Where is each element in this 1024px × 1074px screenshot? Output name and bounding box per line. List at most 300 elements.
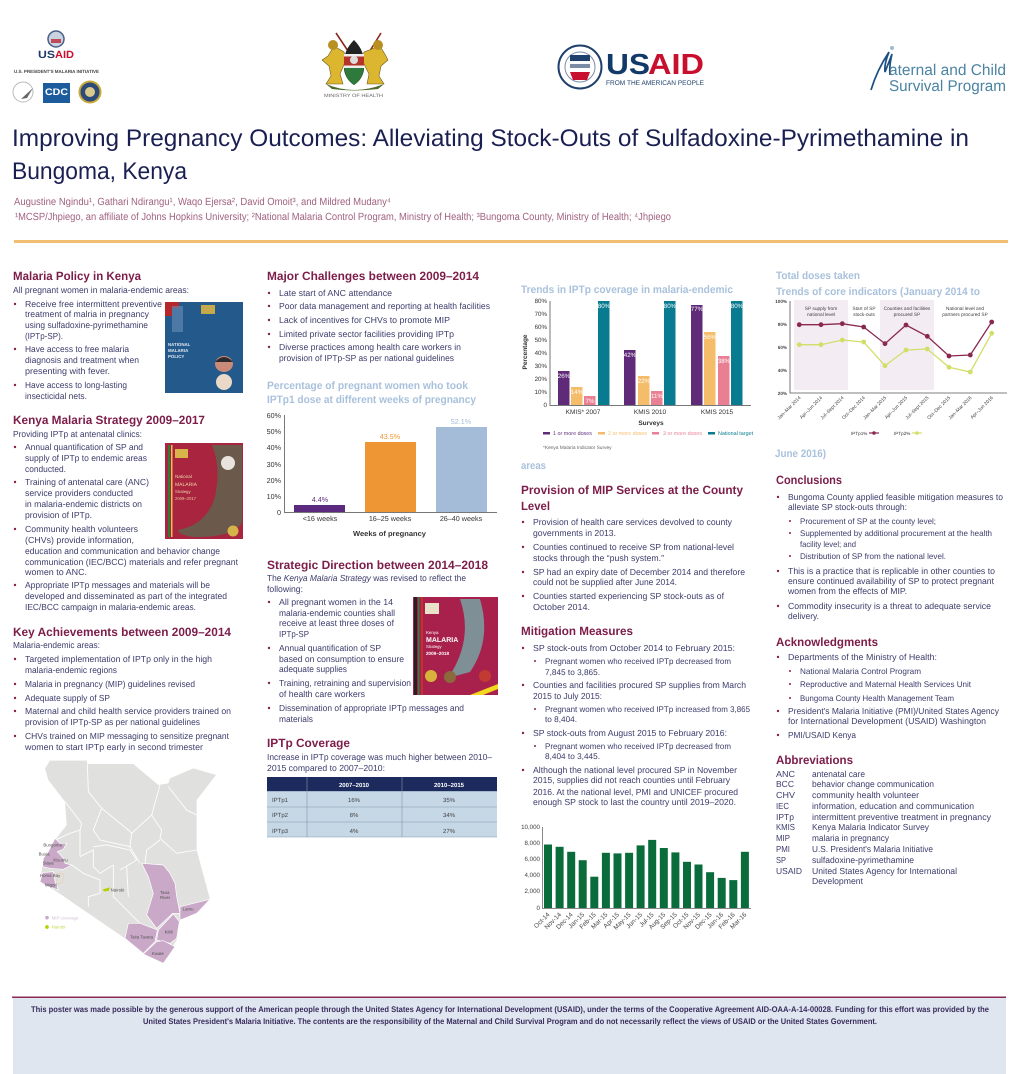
mitigation bullet list: 7,845 to 3,865. xyxy=(545,668,600,677)
IPTp coverage table: 35% xyxy=(443,797,456,804)
IPTp coverage table: 16% xyxy=(348,797,361,804)
chart: trends of core indicators line chart: 40% xyxy=(778,368,787,373)
map legend xyxy=(45,915,78,930)
provision bullet list xyxy=(522,517,745,612)
chart: trends in IPTp coverage in malaria-endemic areas: 70% xyxy=(535,311,547,318)
chart: trends in IPTp coverage in malaria-endemic areas: 38% xyxy=(718,358,731,365)
chart legend xyxy=(543,431,754,437)
chart: trends in IPTp coverage in malaria-endemic areas: areas xyxy=(521,460,546,472)
abbreviation list: Kenya Malaria Indicator Survey xyxy=(812,822,930,832)
panel: Mitigation Measures xyxy=(521,624,750,807)
map legend: MIP coverage xyxy=(52,915,78,920)
title xyxy=(12,125,969,185)
chart: monthly pregnant women receiving IPTp: Jan-15 xyxy=(567,911,586,930)
county labels: Migori xyxy=(45,883,57,888)
abbreviation list: sulfadoxine-pyrimethamine xyxy=(812,855,914,865)
chart: trends in IPTp coverage in malaria-endemic areas: 30% xyxy=(535,363,547,370)
chart: IPTp1 dose by weeks of pregnancy: 43.5% xyxy=(380,432,401,441)
logo: Maternal and Child Survival Program: Survival Program xyxy=(889,78,1006,95)
logo: USAID from the American people xyxy=(558,46,704,88)
panel: Acknowledgments: Acknowledgments xyxy=(776,635,878,649)
policy bullet list: Receive free intermittent preventive xyxy=(25,299,162,309)
chart: trends of core indicators line chart: Jan–Mar 2015 xyxy=(862,395,888,421)
panel: IPTp Coverage: 2015 compared to 2007–2010: xyxy=(267,763,385,773)
image: Kenya Malaria Strategy 2009-2018 cover: Strategy xyxy=(426,644,443,649)
policy bullet list xyxy=(14,299,162,401)
panel: Key Achievements between 2009–2014 xyxy=(13,625,231,752)
strategy bullet list: Appropriate IPTp messages and materials will be xyxy=(25,580,210,590)
orange county outline xyxy=(57,873,63,884)
abbreviation list: ANC xyxy=(776,769,796,779)
chart: trends in IPTp coverage in malaria-endemic areas: Surveys xyxy=(638,420,664,427)
strategic direction bullet list: IPTp-SP xyxy=(279,629,309,639)
chart: trends of core indicators line chart: 80% xyxy=(778,322,787,327)
footer: funding disclaimer xyxy=(12,996,1006,1074)
chart: IPTp1 dose by weeks of pregnancy: 60% xyxy=(267,411,282,420)
provision bullet list: could not be supplied after June 2014. xyxy=(533,577,677,587)
IPTp2 line xyxy=(797,331,994,374)
logo: USAID from the American people: FROM THE AMERICAN PEOPLE xyxy=(606,80,704,87)
chart: trends in IPTp coverage in malaria-endemic areas: 11% xyxy=(651,393,663,400)
policy bullet list: (IPTp-SP). xyxy=(25,331,63,341)
challenges bullet list: Poor data management and reporting at health facilities xyxy=(279,301,491,311)
panel: Kenya Malaria Strategy 2009–2017 xyxy=(13,413,243,612)
chart: monthly pregnant women receiving IPTp: Nov-14 xyxy=(543,911,563,931)
chart: monthly pregnant women receiving IPTp: Mar-15 xyxy=(590,911,610,931)
policy bullet list: using sulfadoxine-pyrimethamine xyxy=(25,320,148,330)
chart: trends of core indicators line chart: National level and xyxy=(946,306,984,312)
panel: Acknowledgments xyxy=(776,635,1000,740)
chart: trends in IPTp coverage in malaria-endemic areas: Percentage xyxy=(522,334,529,370)
provision bullet list: stocks through the “push system.” xyxy=(533,553,664,563)
line chart legend: IPTp2% xyxy=(894,431,910,436)
image: Kenya Malaria Strategy 2009-2018 cover: 2009–2018 xyxy=(426,651,449,656)
chart: monthly pregnant women receiving IPTp: Sep-15 xyxy=(659,911,679,931)
chart: IPTp1 dose by weeks of pregnancy: 26–40 weeks xyxy=(440,514,483,523)
chart: trends of core indicators line chart: 60% xyxy=(778,345,787,350)
chart: trends of core indicators line chart: Oct–Dec 2014 xyxy=(841,395,867,421)
chart: trends of core indicators line chart: 20% xyxy=(778,391,787,396)
mitigation bullet list: SP stock-outs from August 2015 to February 2016: xyxy=(533,728,727,738)
achievements bullet list: Adequate supply of SP xyxy=(25,693,110,703)
conclusions bullet list: Supplemented by additional procurement at the health xyxy=(800,529,992,538)
chart: IPTp1 dose by weeks of pregnancy: 40% xyxy=(267,443,282,452)
chart: trends of core indicators line chart: Start of SP xyxy=(852,306,876,312)
strategic direction bullet list: receive at least three doses of xyxy=(279,618,395,628)
chart: trends of core indicators line chart: Jan–Mar 2016 xyxy=(947,395,974,421)
strategic direction bullet list xyxy=(268,597,464,724)
chart: trends in IPTp coverage in malaria-endemic areas: Trends in IPTp coverage in malaria-endemic xyxy=(521,284,733,296)
logo: Maternal and Child Survival Program: aternal and Child xyxy=(889,62,1006,79)
strategy bullet list xyxy=(14,442,239,612)
chart: IPTp1 dose by weeks of pregnancy: 4.4% xyxy=(312,495,329,504)
chart: monthly pregnant women receiving IPTp xyxy=(521,824,751,931)
chart: IPTp1 dose by weeks of pregnancy: 30% xyxy=(267,460,282,469)
county labels: River xyxy=(160,895,170,900)
chart legend: 3 or more doses xyxy=(663,431,702,437)
panel: IPTp Coverage: Increase in IPTp coverage was much higher between 2010– xyxy=(267,752,492,762)
challenges bullet list: Lack of incentives for CHVs to promote MIP xyxy=(279,315,450,325)
panel: Provision of MIP Services at the County Level: Level xyxy=(521,499,550,513)
chart: monthly pregnant women receiving IPTp: Aug-15 xyxy=(648,911,668,931)
chart: trends in IPTp coverage in malaria-endemic areas: 80% xyxy=(598,303,611,310)
chart: monthly pregnant women receiving IPTp: Feb-15 xyxy=(578,911,598,931)
chart: trends of core indicators line chart: SP supply from xyxy=(805,306,837,312)
chart: monthly pregnant women receiving IPTp: 2,000 xyxy=(525,888,541,895)
policy bullet list: Have access to long-lasting xyxy=(25,380,127,390)
county labels: Tana xyxy=(160,890,170,895)
chart: trends in IPTp coverage in malaria-endemic areas: 7% xyxy=(586,398,595,405)
chart: monthly pregnant women receiving IPTp: Dec-14 xyxy=(555,911,575,931)
chart: trends of core indicators line chart: Trends of core indicators (January 2014 to xyxy=(776,286,980,298)
panel: Kenya Malaria Strategy 2009–2017: Providing IPTp at antenatal clinics: xyxy=(13,429,142,439)
panel: Malaria Policy in Kenya xyxy=(13,269,243,401)
chart: trends of core indicators line chart: June 2016) xyxy=(775,448,826,460)
acknowledgments bullet list: Departments of the Ministry of Health: xyxy=(788,652,937,662)
conclusions bullet list: Commodity insecurity is a threat to adequate service xyxy=(788,601,991,611)
abbreviation list: intermittent preventive treatment in pregnancy xyxy=(812,812,992,822)
mitigation bullet list: Pregnant women who received IPTp decreased from xyxy=(545,657,731,666)
county labels xyxy=(39,842,194,956)
abbreviation list: malaria in pregnancy xyxy=(812,833,890,843)
chart: trends of core indicators line chart: Counties and facilities xyxy=(884,306,931,312)
chart: trends in IPTp coverage in malaria-endemic areas: 0 xyxy=(544,402,548,409)
challenges bullet list: Diverse practices among health care workers in xyxy=(279,342,461,352)
county labels: Nairobi xyxy=(111,887,124,892)
chart: trends in IPTp coverage in malaria-endemic areas: 80% xyxy=(664,303,677,310)
policy bullet list: treatment of malria in pregnancy xyxy=(25,309,150,319)
provision bullet list: Counties started experiencing SP stock-outs as of xyxy=(533,591,725,601)
image: Kenya Malaria Strategy 2009-2018 cover: Kenya xyxy=(426,630,439,635)
IPTp coverage table: 27% xyxy=(443,828,456,835)
chart legend: 2 or more doses xyxy=(608,431,647,437)
mitigation bullet list: enough SP stock to last the country until 2019–2020. xyxy=(533,797,736,807)
achievements bullet list xyxy=(14,654,231,752)
line chart legend xyxy=(851,431,922,436)
chart: trends of core indicators line chart xyxy=(775,270,1007,460)
panel: Key Achievements between 2009–2014: Key Achievements between 2009–2014 xyxy=(13,625,231,639)
acknowledgments bullet list: for International Development (USAID) Washington xyxy=(788,716,986,726)
strategic direction bullet list: adequate supplies xyxy=(279,664,348,674)
achievements bullet list: Targeted implementation of IPTp only in the high xyxy=(25,654,212,664)
mitigation bullet list: 2015, supplies did not reach counties until February xyxy=(533,775,731,785)
panel: Provision of MIP Services at the County Level xyxy=(521,483,745,612)
achievements bullet list: provision of IPTp-SP as per national guidelines xyxy=(25,717,201,727)
logo: Kenya Ministry of Health coat of arms xyxy=(322,33,388,99)
chart: monthly pregnant women receiving IPTp: 6,000 xyxy=(525,856,541,863)
chart: trends of core indicators line chart: stock-outs xyxy=(853,312,876,318)
chart: trends in IPTp coverage in malaria-endemic areas: KMIS 2010 xyxy=(634,409,666,416)
provision bullet list: SP had an expiry date of December 2014 and therefore xyxy=(533,567,745,577)
panel: Malaria Policy in Kenya: All pregnant women in malaria-endemic areas: xyxy=(13,285,189,295)
strategy bullet list: Community health volunteers xyxy=(25,524,139,534)
policy bullet list: insecticidal nets. xyxy=(25,391,87,401)
county labels: Kisumu xyxy=(53,858,68,863)
strategic direction bullet list: Training, retraining and supervision xyxy=(279,678,411,688)
chart: monthly pregnant women receiving IPTp: Dec-15 xyxy=(694,911,714,931)
IPTp coverage table: 4% xyxy=(350,828,359,835)
county labels: Kwale xyxy=(152,951,164,956)
gold divider xyxy=(14,240,1008,243)
logo: Kenya Ministry of Health coat of arms: MINISTRY OF HEALTH xyxy=(324,93,384,99)
strategy bullet list: IEC/BCC campaign in malaria-endemic areas. xyxy=(25,602,196,612)
chart: trends in IPTp coverage in malaria-endemic areas: *Kenya Malaria Indicator Survey xyxy=(543,445,612,451)
chart: trends in IPTp coverage in malaria-endemic areas xyxy=(521,284,754,472)
chart: monthly pregnant women receiving IPTp: Feb-16 xyxy=(717,911,737,931)
authors and affiliations: ¹MCSP/Jhpiego, an affiliate of Johns Hopkins University; ²National Malaria Control Program, Ministry of Health; ³Bungoma County, Ministry of Health; ⁴Jhpiego xyxy=(15,212,671,223)
chart: monthly pregnant women receiving IPTp: Nov-15 xyxy=(682,911,702,931)
chart: monthly pregnant women receiving IPTp: Jul-15 xyxy=(638,911,656,929)
image: National Malaria Policy cover: NATIONAL xyxy=(168,342,191,347)
panel: Major Challenges between 2009–2014: Major Challenges between 2009–2014 xyxy=(267,269,479,283)
chart: trends of core indicators line chart: Jan–Mar 2014 xyxy=(776,395,803,421)
strategy bullet list: women to ANC. xyxy=(24,567,87,577)
image: Kenya Malaria Strategy 2009-2017 cover xyxy=(165,443,243,539)
panel: Strategic Direction between 2014–2018: following: xyxy=(267,584,303,594)
strategic direction bullet list: based on consumption to ensure xyxy=(279,654,404,664)
image: National Malaria Policy cover: POLICY xyxy=(168,354,184,359)
abbreviation list: SP xyxy=(776,855,786,865)
abbreviation list: United States Agency for International xyxy=(812,866,957,876)
logo: USAID President's Malaria Initiative block: U.S. PRESIDENT'S MALARIA INITIATIVE xyxy=(14,69,99,74)
chart: trends of core indicators line chart: 100% xyxy=(775,299,787,304)
policy bullet list: presenting with fever. xyxy=(25,366,110,376)
mitigation bullet list xyxy=(522,643,750,807)
chart legend: National target xyxy=(718,431,754,437)
panel: Conclusions xyxy=(776,473,1003,621)
strategy bullet list: education and communication and behavior change xyxy=(25,546,220,556)
conclusions bullet list: Bungoma County applied feasible mitigation measures to xyxy=(788,492,1003,502)
strategy bullet list: developed and disseminated as part of the integrated xyxy=(25,591,227,601)
conclusions bullet list: This is a practice that is replicable in other counties to xyxy=(788,566,995,576)
chart: monthly pregnant women receiving IPTp: Jun-15 xyxy=(625,911,644,930)
abbreviation list xyxy=(776,769,992,886)
abbreviation list: Development xyxy=(812,876,864,886)
county labels: Taita Taveta xyxy=(130,935,153,940)
achievements bullet list: malaria-endemic regions xyxy=(25,665,118,675)
conclusions bullet list: facility level; and xyxy=(800,540,856,549)
abbreviation list: U.S. President's Malaria Initiative xyxy=(812,844,933,854)
achievements bullet list: Malaria in pregnancy (MIP) guidelines revised xyxy=(25,679,195,689)
mitigation bullet list: 8,404 to 3,445. xyxy=(545,752,600,761)
IPTp coverage table: 34% xyxy=(443,812,456,819)
logo: USAID from the American people: AID xyxy=(648,49,704,81)
title: Bungoma, Kenya xyxy=(12,158,188,185)
chart: trends of core indicators line chart: Apr–Jun 2015 xyxy=(884,395,909,421)
chart: trends of core indicators line chart: Apr–Jun 2014 xyxy=(799,395,824,421)
abbreviation list: community health volunteer xyxy=(812,790,919,800)
strategy bullet list: supply of IPTp to endemic areas xyxy=(25,453,148,463)
conclusions bullet list: ensure continued availability of SP to protect pregnant xyxy=(788,576,995,586)
logo: USAID President's Malaria Initiative block xyxy=(13,31,100,103)
chart: monthly pregnant women receiving IPTp: Mar-16 xyxy=(729,911,749,931)
image: Kenya Malaria Strategy 2009-2018 cover xyxy=(413,597,498,695)
county labels: Homa Bay xyxy=(40,873,60,878)
footer: funding disclaimer: United States President's Malaria Initiative. The contents are the responsibility of the Maternal and Child Survival Program and do not necessarily reflect the views of USAID or the United States Government. xyxy=(143,1017,877,1026)
chart: monthly pregnant women receiving IPTp: 10,000 xyxy=(521,824,541,831)
image: National Malaria Policy cover: MALARIA xyxy=(168,348,189,353)
abbreviation list: USAID xyxy=(776,866,802,876)
chart: trends in IPTp coverage in malaria-endemic areas: 80% xyxy=(535,298,547,305)
image: Kenya Malaria Strategy 2009-2017 cover: National xyxy=(175,474,192,479)
abbreviation list: KMIS xyxy=(776,822,795,832)
map of Kenya with MIP counties xyxy=(39,761,216,963)
IPTp coverage table: 2010–2015 xyxy=(434,782,465,789)
chart: monthly pregnant women receiving IPTp: 0 xyxy=(537,905,541,912)
conclusions bullet list: Distribution of SP from the national level. xyxy=(800,552,946,561)
panel: Malaria Policy in Kenya: Malaria Policy in Kenya xyxy=(13,269,141,283)
mitigation bullet list: Although the national level procured SP in November xyxy=(533,765,737,775)
MIP counties in purple xyxy=(40,838,210,963)
chart: trends of core indicators line chart: partners procured SP xyxy=(942,312,988,318)
achievements bullet list: CHVs trained on MIP messaging to sensitize pregnant xyxy=(25,731,230,741)
panel: Conclusions: Conclusions xyxy=(776,473,842,487)
chart: trends in IPTp coverage in malaria-endemic areas: KMIS* 2007 xyxy=(566,409,601,416)
authors and affiliations xyxy=(14,197,671,223)
chart: trends in IPTp coverage in malaria-endemic areas: 26% xyxy=(558,373,571,380)
chart: trends in IPTp coverage in malaria-endemic areas: 22% xyxy=(638,378,651,385)
mitigation bullet list: SP stock-outs from October 2014 to February 2015: xyxy=(533,643,735,653)
chart: IPTp1 dose by weeks of pregnancy: <16 weeks xyxy=(303,514,338,523)
challenges bullet list: provision of IPTp-SP as per national guidelines xyxy=(279,353,455,363)
strategy bullet list: communication (IEC/BCC) materials and refer pregnant xyxy=(25,557,239,567)
conclusions bullet list: alleviate SP stock-outs through: xyxy=(788,502,907,512)
strategic direction bullet list: malaria-endemic counties shall xyxy=(279,608,395,618)
chart: trends of core indicators line chart: procured SP xyxy=(894,312,920,318)
panel: Mitigation Measures: Mitigation Measures xyxy=(521,624,633,638)
image: National Malaria Policy cover xyxy=(165,302,243,393)
chart: trends in IPTp coverage in malaria-endemic areas: 42% xyxy=(624,352,637,359)
panel: Key Achievements between 2009–2014: Malaria-endemic areas: xyxy=(13,640,100,650)
mitigation bullet list: 2015 to July 2015: xyxy=(533,691,602,701)
chart: IPTp1 dose by weeks of pregnancy: Weeks of pregnancy xyxy=(353,529,426,538)
IPTp coverage table: IPTp1 xyxy=(272,797,289,804)
provision bullet list: governments in 2013. xyxy=(533,528,616,538)
chart: monthly pregnant women receiving IPTp: 8,000 xyxy=(525,840,541,847)
conclusions bullet list: women from the effects of MIP. xyxy=(787,586,907,596)
abbreviation list: CHV xyxy=(776,790,795,800)
county labels: Kilifi xyxy=(165,929,173,934)
chart: trends of core indicators line chart: Jul–Sept 2014 xyxy=(819,395,846,421)
provision bullet list: October 2014. xyxy=(533,602,590,612)
image: Kenya Malaria Strategy 2009-2017 cover: Strategy xyxy=(175,489,192,494)
strategy bullet list: Training of antenatal care (ANC) xyxy=(25,477,149,487)
IPTp coverage table: 2007–2010 xyxy=(339,782,370,789)
abbreviation list: antenatal care xyxy=(812,769,865,779)
mitigation bullet list: Pregnant women who received IPTp decreased from xyxy=(545,742,731,751)
chart: trends in IPTp coverage in malaria-endemic areas: 77% xyxy=(691,306,704,313)
abbreviation list: BCC xyxy=(776,779,795,789)
strategy bullet list: provision of IPTp. xyxy=(25,510,92,520)
achievements bullet list: women to start IPTp early in second trimester xyxy=(24,742,203,752)
strategic direction bullet list: Dissemination of appropriate IPTp messages and xyxy=(279,703,464,713)
image: Kenya Malaria Strategy 2009-2017 cover: 2009–2017 xyxy=(175,496,197,501)
panel: Strategic Direction between 2014–2018: Strategic Direction between 2014–2018 xyxy=(267,558,488,572)
chart: trends of core indicators line chart: national level xyxy=(807,312,835,318)
line chart legend: IPTp1% xyxy=(851,431,867,436)
panel: Kenya Malaria Strategy 2009–2017: Kenya Malaria Strategy 2009–2017 xyxy=(13,413,205,427)
provision bullet list: Counties continued to receive SP from national-level xyxy=(533,542,734,552)
chart: trends in IPTp coverage in malaria-endemic areas: 60% xyxy=(535,324,547,331)
logo: USAID President's Malaria Initiative block: CDC xyxy=(45,87,68,98)
strategic direction bullet list: All pregnant women in the 14 xyxy=(279,597,393,607)
map legend: Nairobi xyxy=(52,925,65,930)
chart: trends in IPTp coverage in malaria-endemic areas: 80% xyxy=(731,303,744,310)
conclusions bullet list: Procurement of SP at the county level; xyxy=(800,517,936,526)
abbreviation list: IPTp xyxy=(776,812,794,822)
Nairobi marker xyxy=(103,887,110,891)
provision bullet list: Provision of health care services devolved to county xyxy=(533,517,733,527)
strategy bullet list: Annual quantification of SP and xyxy=(25,442,143,452)
chart: trends in IPTp coverage in malaria-endemic areas: 10% xyxy=(535,389,547,396)
panel: Major Challenges between 2009–2014 xyxy=(267,269,491,363)
mitigation bullet list: 2016. At the national level, PMI and UNICEF procured xyxy=(533,787,738,797)
county labels: Siaya xyxy=(43,860,54,865)
policy bullet list: Have access to free malaria xyxy=(25,344,129,354)
chart: IPTp1 dose by weeks of pregnancy: 16–25 weeks xyxy=(369,514,412,523)
chart: IPTp1 dose by weeks of pregnancy: 50% xyxy=(267,427,282,436)
policy bullet list: diagnosis and treatment when xyxy=(25,355,139,365)
chart: IPTp1 dose by weeks of pregnancy: 10% xyxy=(267,492,282,501)
abbreviation list: information, education and communication xyxy=(812,801,974,811)
chart: monthly pregnant women receiving IPTp: 4,000 xyxy=(525,872,541,879)
chart: IPTp1 dose by weeks of pregnancy: Percentage of pregnant women who took xyxy=(267,380,469,392)
chart: monthly pregnant women receiving IPTp: Jan-16 xyxy=(706,911,725,930)
county labels: Lamu xyxy=(183,907,194,912)
chart: monthly pregnant women receiving IPTp: May-15 xyxy=(612,911,633,931)
image: Kenya Malaria Strategy 2009-2017 cover: MALARIA xyxy=(175,482,198,488)
panel: Strategic Direction between 2014–2018: The Kenya Malaria Strategy was revised to reflect the xyxy=(267,573,466,583)
county labels: Busia xyxy=(39,852,50,857)
challenges bullet list xyxy=(268,288,491,363)
IPTp coverage table xyxy=(267,777,497,837)
strategy bullet list: (CHVs) provide information, xyxy=(25,535,134,545)
mitigation bullet list: Counties and facilities procured SP supplies from March xyxy=(533,680,746,690)
strategy bullet list: service providers conducted xyxy=(25,488,133,498)
chart: monthly pregnant women receiving IPTp: Oct-15 xyxy=(672,911,691,930)
authors and affiliations: Augustine Ngindu¹, Gathari Ndirangu¹, Waqo Ejersa², David Omoit³, and Mildred Mudany⁴ xyxy=(14,197,391,208)
chart: trends in IPTp coverage in malaria-endemic areas: 40% xyxy=(535,350,547,357)
abbreviation list: IEC xyxy=(776,801,790,811)
acknowledgments bullet list: President's Malaria Initiative (PMI)/United States Agency xyxy=(788,706,1000,716)
panel: Strategic Direction between 2014–2018 xyxy=(267,558,498,724)
strategy bullet list: in malaria-endemic districts on xyxy=(25,499,142,509)
acknowledgments bullet list: Bungoma County Health Management Team xyxy=(800,694,954,703)
chart: IPTp1 dose by weeks of pregnancy: 20% xyxy=(267,476,282,485)
acknowledgments bullet list xyxy=(777,652,1000,740)
strategic direction bullet list: of health care workers xyxy=(279,689,366,699)
panel: IPTp Coverage xyxy=(267,736,497,837)
chart: trends of core indicators line chart: Jul–Sept 2015 xyxy=(904,395,931,421)
chart: trends of core indicators line chart: Oct–Dec 2015 xyxy=(926,395,952,421)
mitigation bullet list: to 8,404. xyxy=(545,715,577,724)
acknowledgments bullet list: National Malaria Control Program xyxy=(800,667,921,676)
IPTp1 line xyxy=(797,320,994,358)
abbreviation list: MIP xyxy=(776,833,790,843)
panel: Provision of MIP Services at the County Level: Provision of MIP Services at the County xyxy=(521,483,743,497)
chart: IPTp1 dose by weeks of pregnancy: IPTp1 dose at different weeks of pregnancy xyxy=(267,394,476,406)
chart: trends in IPTp coverage in malaria-endemic areas: 50% xyxy=(535,337,547,344)
strategy bullet list: conducted. xyxy=(25,464,66,474)
IPTp coverage table: 8% xyxy=(350,812,359,819)
conclusions bullet list: delivery. xyxy=(788,611,819,621)
challenges bullet list: Limited private sector facilities providing IPTp xyxy=(279,329,454,339)
chart: trends of core indicators line chart: Apr–Jun 2016 xyxy=(969,395,995,421)
logo: USAID President's Malaria Initiative block: US xyxy=(38,49,55,61)
chart: trends in IPTp coverage in malaria-endemic areas: KMIS 2015 xyxy=(701,409,733,416)
panel: IPTp Coverage: IPTp Coverage xyxy=(267,736,350,750)
panel: Abbreviations xyxy=(776,753,992,886)
